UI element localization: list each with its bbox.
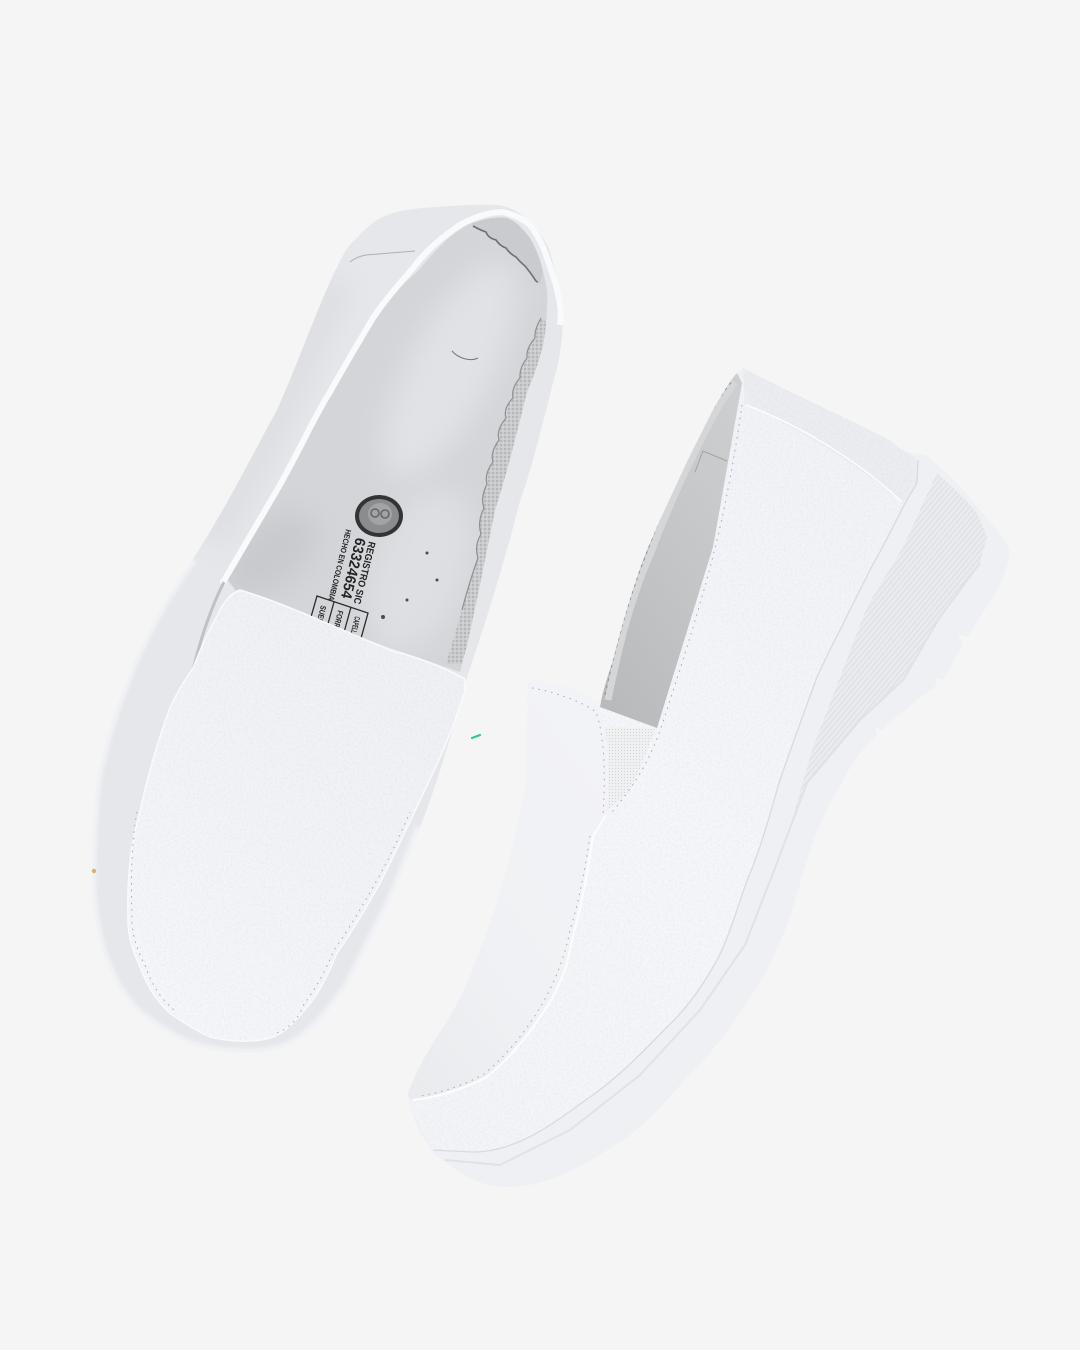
right shoe upper leather	[400, 368, 918, 1152]
right shoe (side view)	[408, 368, 987, 1166]
insole print: materials boxes	[310, 595, 369, 638]
upper-to-sole seam	[433, 460, 918, 1152]
insole print: registration text: 63324654	[337, 536, 369, 601]
right shoe outsole	[400, 360, 1020, 1200]
insole perforation dots	[381, 552, 438, 619]
right shoe tread notches	[875, 634, 967, 738]
insole print: registration text: HECHO EN COLOMBIA	[326, 529, 353, 602]
heel lining band	[472, 218, 543, 284]
left shoe insole	[228, 218, 548, 672]
right shoe elastic gusset	[605, 727, 655, 811]
insole crease mark	[452, 351, 478, 360]
right shoe sole and upper	[408, 368, 987, 1166]
left shoe vamp panel	[120, 585, 470, 1045]
stitching lines	[746, 405, 902, 502]
insole brand logo	[355, 495, 403, 537]
insole print: materials boxes: FORRO	[331, 610, 345, 633]
instep crescent gap	[193, 582, 224, 670]
left shoe small mark	[92, 869, 96, 873]
right shoe lining outer stitched edge	[608, 382, 735, 700]
right shoe apron panel	[408, 1056, 447, 1100]
left shoe white collar binding	[222, 212, 561, 584]
insole print: materials boxes: SUELA	[314, 605, 328, 628]
product photo: pair of white loafers	[92, 205, 987, 1166]
green speck	[472, 735, 480, 738]
right shoe heel band	[743, 368, 918, 504]
left shoe heel seam	[350, 251, 415, 262]
right shoe outsole line	[445, 563, 980, 1165]
left shoe (top view)	[92, 205, 563, 1050]
apron seam highlight	[413, 815, 606, 1100]
right shoe lining	[600, 373, 742, 728]
left shoe outer rim	[96, 205, 563, 1050]
insole scalloped edge line	[462, 318, 541, 610]
insole print: materials boxes: CAPELLADA	[347, 616, 362, 643]
right shoe ribbed wedge	[792, 473, 987, 820]
insole print: registration text	[326, 529, 377, 605]
vamp stitching	[132, 812, 410, 1033]
insole print: registration text: REGISTRO SIC	[351, 540, 377, 605]
right shoe lining tab	[695, 451, 727, 472]
insole foam strip behind scalloped edge	[446, 318, 556, 664]
